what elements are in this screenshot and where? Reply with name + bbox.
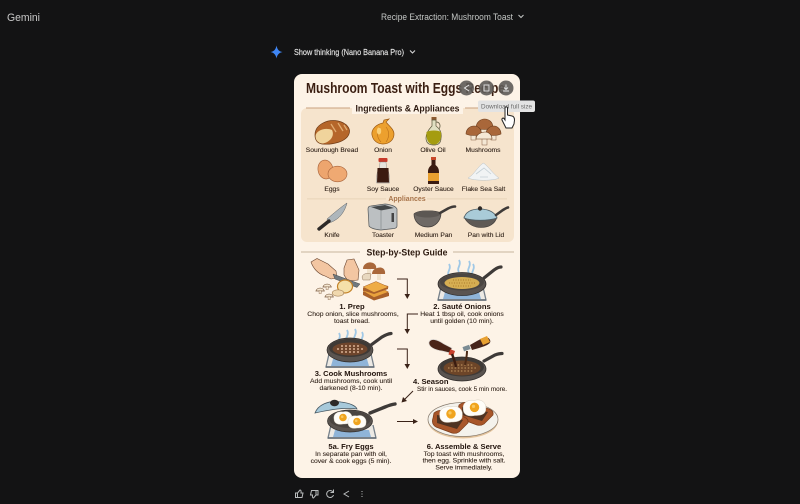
image overlay: copy button (479, 80, 494, 96)
icon: thumbs up (296, 490, 303, 498)
step 4: season illustration (429, 336, 502, 381)
ingredient: flake sea salt: Flake Sea Salt (462, 186, 505, 193)
step 6: assembled toast illustration (428, 400, 498, 438)
icon: Gemini blue spark (270, 46, 282, 58)
ingredient: onion: Onion (374, 147, 392, 154)
step 3: cook mushrooms illustration (326, 329, 391, 367)
icon: thumbs down (310, 490, 318, 498)
icon: hand cursor (502, 107, 514, 128)
appliance: knife (319, 203, 347, 239)
show thinking toggle: Show thinking (Nano Banana Pro) (294, 47, 404, 57)
step 6: text (422, 442, 506, 472)
appliance: knife: Knife (324, 232, 340, 239)
step 5a: text (311, 442, 392, 465)
step 2: text: until golden (10 min). (430, 318, 494, 325)
step 6: text: 6. Assemble & Serve (427, 442, 501, 451)
app name: Gemini: Gemini (7, 12, 40, 24)
image overlay: download button (498, 80, 514, 96)
step 3: text: Add mushrooms, cook until (310, 378, 392, 385)
ingredient: mushrooms: Mushrooms (466, 147, 501, 154)
step 1: text: toast bread. (334, 318, 370, 325)
step 1: text: 1. Prep (339, 302, 365, 311)
ingredient: sourdough bread (306, 121, 358, 154)
heading: ingredients and appliances: Ingredients & Appliances (356, 104, 460, 114)
step 1: text: Chop onion, slice mushrooms, (307, 311, 399, 318)
ingredient: oyster sauce (413, 157, 454, 193)
arrow: season to fry eggs (402, 391, 413, 402)
recipe title: Mushroom Toast with Eggs Recipe (306, 81, 505, 97)
step 2: text: 2. Sauté Onions (433, 302, 491, 311)
panel: ingredients and appliances (301, 102, 514, 242)
appliance: pan with lid (464, 206, 508, 239)
ingredient: oyster sauce: Oyster Sauce (413, 186, 454, 193)
step 3: text: darkened (8-10 min). (319, 385, 383, 392)
step 2: text (420, 302, 504, 325)
tooltip: download full size (478, 100, 535, 112)
step 6: text: Top toast with mushrooms, (424, 451, 505, 458)
ingredient: eggs: Eggs (324, 186, 340, 193)
appliance: medium pan (414, 206, 455, 239)
step 4: text (413, 377, 507, 393)
ingredient: soy sauce (367, 158, 399, 193)
icon: more menu (361, 491, 363, 497)
step 1: text (307, 302, 399, 325)
appliance: toaster: Toaster (372, 232, 395, 239)
step 4: text: 4. Season (413, 377, 449, 386)
step 1: prep illustration (311, 258, 389, 300)
appliance: pan with lid: Pan with Lid (468, 232, 504, 239)
ingredient: sourdough bread: Sourdough Bread (306, 147, 358, 154)
arrow: cook mushrooms to season (397, 349, 410, 369)
step 6: text: Serve immediately. (435, 464, 493, 472)
step 3: text (310, 369, 392, 392)
panel: recipe card (294, 74, 520, 478)
icon: regenerate (327, 490, 334, 498)
subheading: appliances: Appliances (388, 196, 426, 203)
ingredient: olive oil (420, 117, 446, 154)
step 5a: text: 5a. Fry Eggs (328, 442, 374, 451)
step 5a: text: In separate pan with oil, (315, 451, 387, 458)
arrow: prep to saute (397, 279, 410, 299)
step 5a: fry eggs illustration (315, 400, 395, 438)
step 4: text: Stir in sauces, cook 5 min more. (417, 386, 507, 393)
ingredient: mushrooms (466, 119, 501, 154)
ingredient: onion (372, 119, 394, 154)
arrow: saute to cook mushrooms (404, 314, 418, 334)
arrow: fry eggs to assemble (397, 419, 418, 424)
heading: step-by-step guide: Step-by-Step Guide (366, 248, 448, 258)
ingredient: eggs (316, 159, 347, 193)
step 3: text: 3. Cook Mushrooms (315, 369, 387, 378)
feedback action row (296, 490, 362, 498)
appliance: medium pan: Medium Pan (415, 232, 453, 239)
step 2: text: Heat 1 tbsp oil, cook onions (420, 311, 504, 318)
tooltip: download full size: Download full size (481, 104, 532, 110)
ingredient: soy sauce: Soy Sauce (367, 186, 399, 193)
ingredient: olive oil: Olive Oil (420, 147, 446, 154)
step 6: text: then egg. Sprinkle with salt. (422, 458, 506, 464)
step 5a: text: cover & cook eggs (5 min). (311, 458, 392, 465)
chat title with chevron: Recipe Extraction: Mushroom Toast (381, 12, 513, 22)
step 2: saute onions illustration (438, 260, 501, 300)
image overlay: share button (459, 80, 474, 96)
icon: share (344, 491, 349, 497)
appliance: toaster (368, 204, 397, 239)
ingredient: flake sea salt (462, 163, 505, 193)
